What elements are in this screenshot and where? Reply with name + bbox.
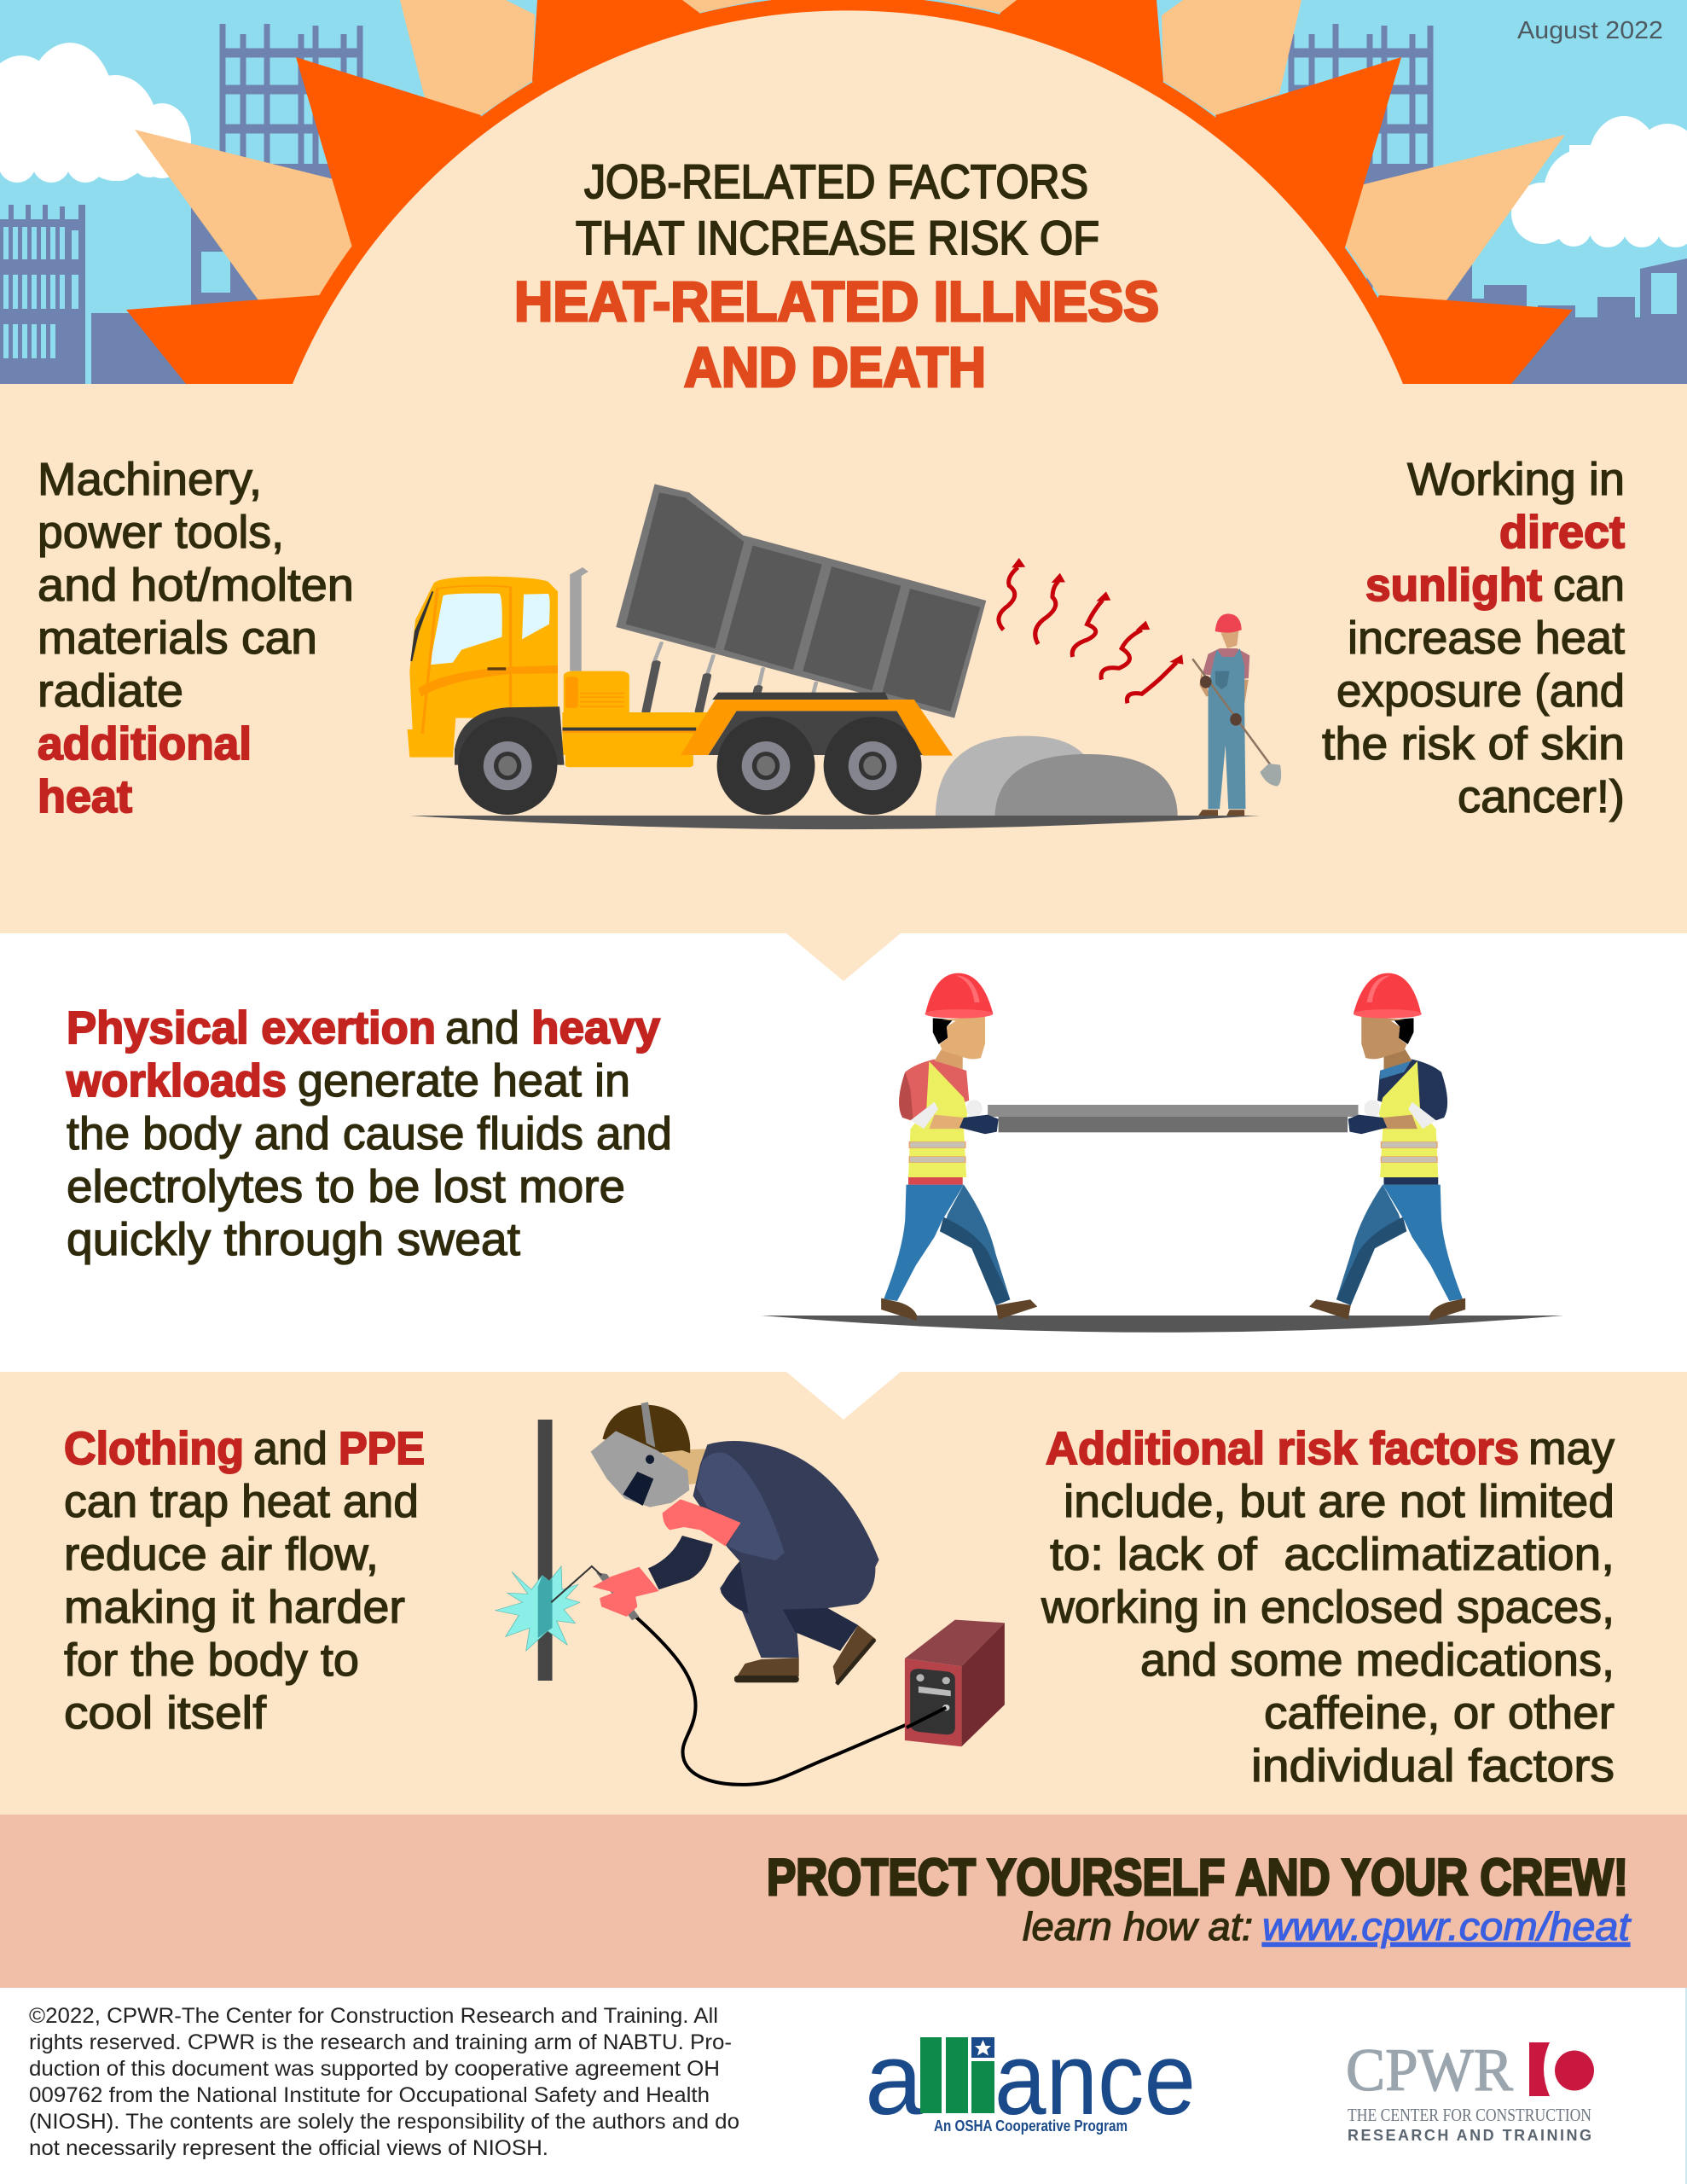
- logo: CPWR: CPWR: [1346, 2037, 1514, 2104]
- text: machinery heat: radiate: [38, 665, 183, 717]
- disclaimer text: duction of this document was supported by cooperative agreement OH: [29, 2057, 720, 2081]
- text: exertion: and: [445, 1002, 519, 1054]
- text: clothing and PPE: can trap heat and: [64, 1476, 419, 1527]
- text: direct sunlight: sunlight: [1365, 560, 1542, 611]
- notch pointer: [786, 933, 901, 981]
- logo: CPWR: THE CENTER FOR CONSTRUCTION: [1348, 2105, 1591, 2125]
- title: JOB-RELATED FACTORS: [584, 154, 1088, 208]
- logo: CPWR: [1346, 2037, 1594, 2144]
- welding cable: [635, 1617, 946, 1785]
- welder figure: [551, 1402, 879, 1685]
- panel background: [0, 1372, 1687, 1815]
- date: August 2022: [1517, 17, 1663, 44]
- disclaimer text: ©2022, CPWR-The Center for Construction Research and Training. All: [29, 2004, 718, 2028]
- weld spark: [496, 1566, 580, 1651]
- text: additional risk factors: to: lack of acclimatization,: [1050, 1529, 1615, 1580]
- text: additional risk factors: and some medications,: [1140, 1635, 1615, 1686]
- disclaimer text: rights reserved. CPWR is the research and training arm of NABTU. Pro-: [29, 2030, 732, 2054]
- cloud: right: [1511, 116, 1687, 247]
- text: machinery heat: heat: [38, 771, 132, 822]
- small worker with shovel: [1192, 613, 1281, 816]
- text: additional risk factors: include, but are not limited: [1064, 1476, 1615, 1527]
- dump bed: [616, 484, 986, 718]
- banner background: [0, 1815, 1687, 1988]
- panel: clothing and other risk factors: [0, 1372, 1687, 1815]
- logo: alliance: [865, 2022, 1196, 2136]
- title: THAT INCREASE RISK OF: [576, 211, 1099, 264]
- logo: CPWR: RESEARCH AND TRAINING: [1348, 2127, 1591, 2144]
- text: direct sunlight: the risk of skin: [1322, 718, 1625, 770]
- text: exertion: electrolytes to be lost more: [67, 1161, 625, 1212]
- cloud: left: [0, 43, 191, 183]
- rock pile: [936, 736, 1178, 816]
- text: exertion: the body and cause fluids and: [67, 1108, 672, 1159]
- title: [514, 154, 1159, 398]
- text: clothing and PPE: [64, 1423, 425, 1739]
- panel: header scene: [0, 0, 1687, 384]
- text: machinery heat: and hot/molten: [38, 560, 354, 611]
- disclaimer text: not necessarily represent the official views of NIOSH.: [29, 2136, 548, 2160]
- building: lower-left block: [0, 205, 285, 384]
- link: www.cpwr.com/heat: [1262, 1904, 1632, 1949]
- text: exertion: workloads: [66, 1055, 287, 1107]
- disclaimer text: 009762 from the National Institute for Occupational Safety and Health: [29, 2083, 710, 2107]
- text: machinery heat: Machinery,: [38, 454, 262, 505]
- text: direct sunlight: cancer!): [1458, 771, 1625, 822]
- text: exertion: quickly through sweat: [67, 1214, 520, 1265]
- welding machine: [905, 1620, 1005, 1746]
- metal post: [538, 1420, 553, 1681]
- heat waves: [999, 558, 1183, 703]
- ground shadow: [409, 816, 1260, 829]
- steel beam: [988, 1105, 1358, 1132]
- text: exertion: heavy: [531, 1002, 660, 1054]
- hydraulic rams: [646, 642, 816, 712]
- text: additional risk factors: may: [1528, 1423, 1615, 1474]
- text: clothing and PPE: making it harder: [64, 1582, 405, 1633]
- text: clothing and PPE: PPE: [339, 1423, 425, 1474]
- disclaimer text: [29, 2004, 739, 2160]
- text: additional risk factors: caffeine, or other: [1264, 1687, 1615, 1739]
- sun dome: [293, 10, 1403, 384]
- disclaimer text: (NIOSH). The contents are solely the responsibility of the authors and do: [29, 2110, 739, 2134]
- text: direct sunlight: can: [1553, 560, 1625, 611]
- panel: machinery and sunlight: [0, 384, 1687, 933]
- text: machinery heat: additional: [38, 718, 252, 770]
- logo: alliance: ance: [994, 2022, 1196, 2136]
- title: HEAT-RELATED ILLNESS: [514, 270, 1159, 333]
- sun rays: [126, 0, 1573, 384]
- illustration: two workers carrying beam: [761, 973, 1563, 1333]
- panel: footer: [0, 1988, 1687, 2184]
- learn how at: learn how at:: [1023, 1904, 1253, 1949]
- text: clothing and PPE: for the body to: [64, 1635, 359, 1686]
- text: exertion: [66, 1002, 672, 1265]
- title: AND DEATH: [684, 335, 986, 398]
- text: clothing and PPE: Clothing: [64, 1423, 244, 1474]
- text: machinery heat: materials can: [38, 613, 317, 664]
- text: direct sunlight: increase heat: [1348, 613, 1625, 664]
- notch pointer: [786, 1372, 901, 1420]
- right worker: [1309, 973, 1465, 1321]
- text: direct sunlight: Working in: [1407, 454, 1625, 505]
- ground shadow: [761, 1316, 1563, 1333]
- text: additional risk factors: working in enclosed spaces,: [1041, 1582, 1615, 1633]
- sky background: [0, 0, 1687, 384]
- logo: alliance: An OSHA Cooperative Program: [934, 2117, 1128, 2135]
- edge line: [1685, 1988, 1687, 2184]
- text: machinery heat: power tools,: [38, 507, 284, 558]
- text: exertion: Physical exertion: [67, 1002, 436, 1054]
- rear frame: [681, 693, 953, 756]
- panel background: [0, 933, 1687, 1372]
- text: direct sunlight: exposure (and: [1336, 665, 1625, 717]
- skyline: lower-right blocks: [1441, 258, 1687, 384]
- building: left tall scaffold: [220, 24, 362, 384]
- text: exertion: generate heat in: [298, 1055, 630, 1107]
- text: machinery heat: [38, 454, 354, 822]
- text: clothing and PPE: cool itself: [64, 1687, 267, 1739]
- exhaust stack: [570, 567, 588, 671]
- text: clothing and PPE: reduce air flow,: [64, 1529, 379, 1580]
- panel background: [0, 384, 1687, 933]
- panel: call to action: [0, 1815, 1687, 1988]
- building: right tall scaffold: [1289, 24, 1457, 384]
- illustration: welder: [496, 1402, 1005, 1785]
- text: additional risk factors: [1041, 1423, 1615, 1792]
- truck chassis: [562, 671, 710, 767]
- panel: physical exertion: [0, 933, 1687, 1372]
- text: direct sunlight: [1322, 454, 1625, 822]
- footer background: [0, 1988, 1687, 2184]
- illustration: dump truck scene: [408, 484, 1281, 829]
- left worker: [881, 973, 1037, 1321]
- text: direct sunlight: direct: [1499, 507, 1625, 558]
- truck cab: [408, 577, 564, 765]
- text: additional risk factors: Additional risk factors: [1046, 1423, 1519, 1474]
- logo: alliance: a: [865, 2022, 923, 2136]
- text: clothing and PPE: and: [253, 1423, 328, 1474]
- text: additional risk factors: individual factors: [1251, 1740, 1615, 1792]
- wheels: [458, 717, 922, 815]
